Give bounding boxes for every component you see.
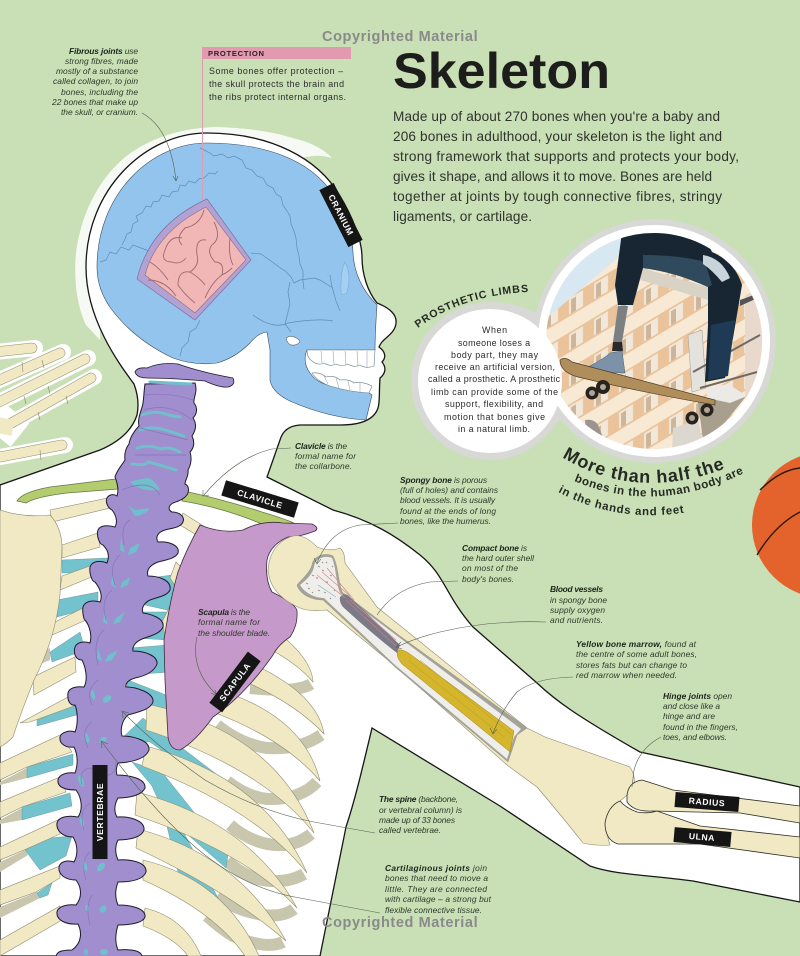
annotation: yellow bone marrow: red marrow when needed.: [576, 670, 677, 680]
label: cranium: [319, 183, 363, 247]
annotation: spongy bone: (full of holes) and contains: [400, 485, 499, 495]
annotation: fibrous joints: the skull, or cranium.: [61, 107, 138, 117]
annotation: clavicle: the collarbone.: [295, 461, 352, 471]
leader: yellow marrow: [490, 677, 573, 734]
intro text: gives it shape, and allows it to move. Bones are held: [393, 169, 712, 184]
intro text: strong framework that supports and protects your body,: [393, 149, 739, 164]
vertebrae: spine: [56, 382, 197, 956]
annotation: compact bone: body's bones.: [462, 574, 514, 584]
prosthetic text: called a prosthetic. A prosthetic: [428, 374, 561, 384]
label: clavicle: CLAVICLE: [236, 487, 284, 511]
annotation: scapula: [198, 607, 270, 638]
title: Skeleton: [393, 43, 610, 99]
radius: [627, 780, 800, 823]
annotation: yellow bone marrow: stores fats but can change to: [576, 660, 687, 670]
prosthetic text: When: [482, 325, 507, 335]
intro text: 206 bones in adulthood, your skeleton is the light and: [393, 129, 722, 144]
left shoulder bone: [0, 510, 62, 747]
leader: cartilaginous joints: [101, 741, 380, 913]
annotation: the spine: [379, 794, 463, 835]
white photo ring: [538, 225, 770, 457]
annotation: hinge joints: toes, and elbows.: [663, 732, 727, 742]
label: cranium: CRANIUM: [326, 193, 356, 237]
annotation: fibrous joints: [51, 46, 138, 117]
prosthetic text: [428, 325, 561, 434]
annotation: the spine: The spine (backbone,: [379, 794, 458, 804]
protection panel: the skull protects the brain and: [209, 79, 344, 89]
annotation: spongy bone: [400, 475, 499, 526]
annotation: yellow bone marrow: [576, 639, 697, 680]
annotation: fibrous joints: bones, including the: [61, 87, 138, 97]
annotation: yellow bone marrow: the centre of some adult bones,: [576, 649, 697, 659]
prosthetic text: someone loses a: [458, 338, 530, 348]
skateboard: [560, 358, 715, 405]
protection panel: Some bones offer protection –: [209, 66, 343, 76]
leader: scapula: [196, 637, 217, 696]
prosthetic text: in a natural limb.: [458, 424, 530, 434]
yellow bone marrow: [397, 650, 514, 752]
label: ulna: ULNA: [688, 831, 716, 843]
icon: hand fingers: [0, 348, 94, 460]
annotation: spongy bone: Spongy bone is porous: [400, 475, 488, 485]
prosthetic text: limb can provide some of the: [431, 387, 558, 397]
annotation: fibrous joints: 22 bones that make up: [51, 97, 138, 107]
prosthetic text: support, flexibility, and: [445, 399, 543, 409]
watermark bottom: Copyrighted Material: [322, 915, 478, 931]
annotation: clavicle: [295, 441, 357, 471]
protection panel: PROTECTION: [208, 49, 264, 58]
leader: clavicle: [203, 448, 291, 496]
annotation: the spine: made up of 33 bones: [379, 815, 456, 825]
heading curved: [418, 292, 527, 328]
annotation: fibrous joints: mostly of a substance: [56, 66, 138, 76]
label: radius: [675, 792, 739, 812]
panel: prosthetic limbs: PROSTHETIC LIMBS: [414, 284, 528, 328]
skull sutures: [100, 148, 340, 356]
clavicle: [17, 479, 294, 525]
annotation: blood vessels: supply oxygen: [550, 605, 605, 615]
annotation: compact bone: on most of the: [462, 563, 518, 573]
annotation: cartilaginous joints: Cartilaginous joints join: [385, 863, 487, 873]
annotation: compact bone: the hard outer shell: [462, 553, 535, 563]
ulna: [605, 801, 800, 858]
annotation: cartilaginous joints: little. They are connected: [385, 884, 487, 894]
annotation: cartilaginous joints: [385, 863, 492, 915]
intro text: together at joints by tough connective fibres, stringy: [393, 189, 722, 204]
cervical top vertebra: [135, 364, 234, 387]
annotation: spongy bone: bones, like the humerus.: [400, 516, 491, 526]
callout: more than half: More than half the: [563, 447, 724, 483]
white text circle: [418, 309, 562, 453]
annotation: hinge joints: and close like a: [663, 701, 720, 711]
annotation: blood vessels: in spongy bone: [550, 595, 607, 605]
protection panel: [202, 47, 351, 200]
watermark top: Copyrighted Material: [322, 29, 478, 45]
label: vertebrae: [92, 765, 108, 859]
annotation: the spine: or vertebral column) is: [379, 805, 463, 815]
teal costal cartilage: [22, 558, 228, 920]
photo: skateboarder with prosthetic leg: [546, 233, 762, 449]
brain section: [137, 199, 251, 320]
annotation: hinge joints: Hinge joints open: [663, 691, 732, 701]
label: clavicle: [221, 480, 299, 518]
nasal opening: [286, 336, 300, 345]
leader: compact bone: [377, 581, 458, 615]
annotation: fibrous joints: Fibrous joints use: [69, 46, 138, 56]
icon: basketball: [752, 452, 800, 598]
scapula: [164, 522, 317, 750]
brain folds: [148, 210, 233, 303]
jeans: [615, 228, 742, 382]
spine cartilage details: [77, 382, 193, 955]
intro text: ligaments, or cartilage.: [393, 209, 532, 224]
eye socket detail: [341, 262, 349, 295]
callout: more than half: bones in the human body are: [574, 468, 743, 496]
protection panel: the ribs protect internal organs.: [209, 92, 346, 102]
annotation: scapula: Scapula is the: [198, 607, 250, 617]
leader: spongy bone: [314, 523, 398, 564]
annotation: cartilaginous joints: bones that need to move a: [385, 873, 488, 883]
label: vertebrae: VERTEBRAE: [95, 783, 105, 841]
lower teeth: [312, 373, 372, 393]
annotation: blood vessels: [550, 584, 607, 625]
annotation: yellow bone marrow: Yellow bone marrow, found at: [576, 639, 697, 649]
prosthetic: [613, 306, 628, 342]
annotation: fibrous joints: strong fibres, made: [65, 56, 138, 66]
intro text: [393, 109, 739, 224]
leader lines: [101, 113, 661, 913]
callout: more than half: in the hands and feet: [558, 485, 684, 516]
panel: prosthetic limbs: [411, 219, 776, 463]
callout: more than half: [558, 447, 743, 516]
annotation: scapula: formal name for: [198, 617, 261, 627]
annotation: clavicle: formal name for: [295, 451, 357, 461]
icon: hair: [75, 127, 332, 340]
prosthetic text: body part, they may: [451, 350, 539, 360]
intro text: Made up of about 270 bones when you're a baby and: [393, 109, 720, 124]
label: scapula: [209, 652, 261, 712]
annotation: fibrous joints: called collagen, to join: [53, 76, 138, 86]
skull: [97, 143, 377, 420]
annotation: hinge joints: [663, 691, 738, 742]
marrow cavity: [340, 594, 400, 653]
annotation: blood vessels: and nutrients.: [550, 615, 603, 625]
annotation: spongy bone: blood vessels. It is usually: [400, 495, 496, 505]
leader: hinge joints: [632, 737, 661, 787]
label: scapula: SCAPULA: [217, 661, 253, 703]
leader: blood vessels: [396, 622, 546, 649]
annotation: clavicle: Clavicle is the: [295, 441, 347, 451]
upper teeth: [307, 350, 375, 367]
annotation: the spine: called vertebrae.: [379, 825, 441, 835]
shoes: [588, 351, 625, 373]
panel: rib cage: [0, 498, 324, 956]
annotation: hinge joints: found in the fingers,: [663, 722, 738, 732]
prosthetic text: receive an artificial version,: [435, 362, 555, 372]
blood vessels: [317, 568, 396, 640]
leader: spine: [122, 711, 375, 833]
annotation: blood vessels: Blood vessels: [550, 584, 603, 594]
label: ulna: [673, 827, 732, 847]
prosthetic text: motion that bones give: [444, 412, 545, 422]
annotation: scapula: the shoulder blade.: [198, 628, 270, 638]
annotation: cartilaginous joints: with cartilage – a strong but: [385, 894, 492, 904]
grey ring: [411, 219, 776, 463]
annotation: compact bone: Compact bone is: [462, 543, 528, 553]
left rib grey ends: [0, 648, 50, 918]
leader: fibrous joints: [142, 113, 178, 181]
annotation: cartilaginous joints: flexible connective tissue.: [385, 905, 482, 915]
bone: humerus and elbow: [268, 536, 800, 858]
annotation: compact bone: [462, 543, 535, 584]
label: radius: RADIUS: [688, 796, 726, 808]
annotation: hinge joints: hinge and are: [663, 711, 715, 721]
annotation: spongy bone: found at the ends of long: [400, 506, 496, 516]
bone cross-section: [297, 554, 527, 762]
